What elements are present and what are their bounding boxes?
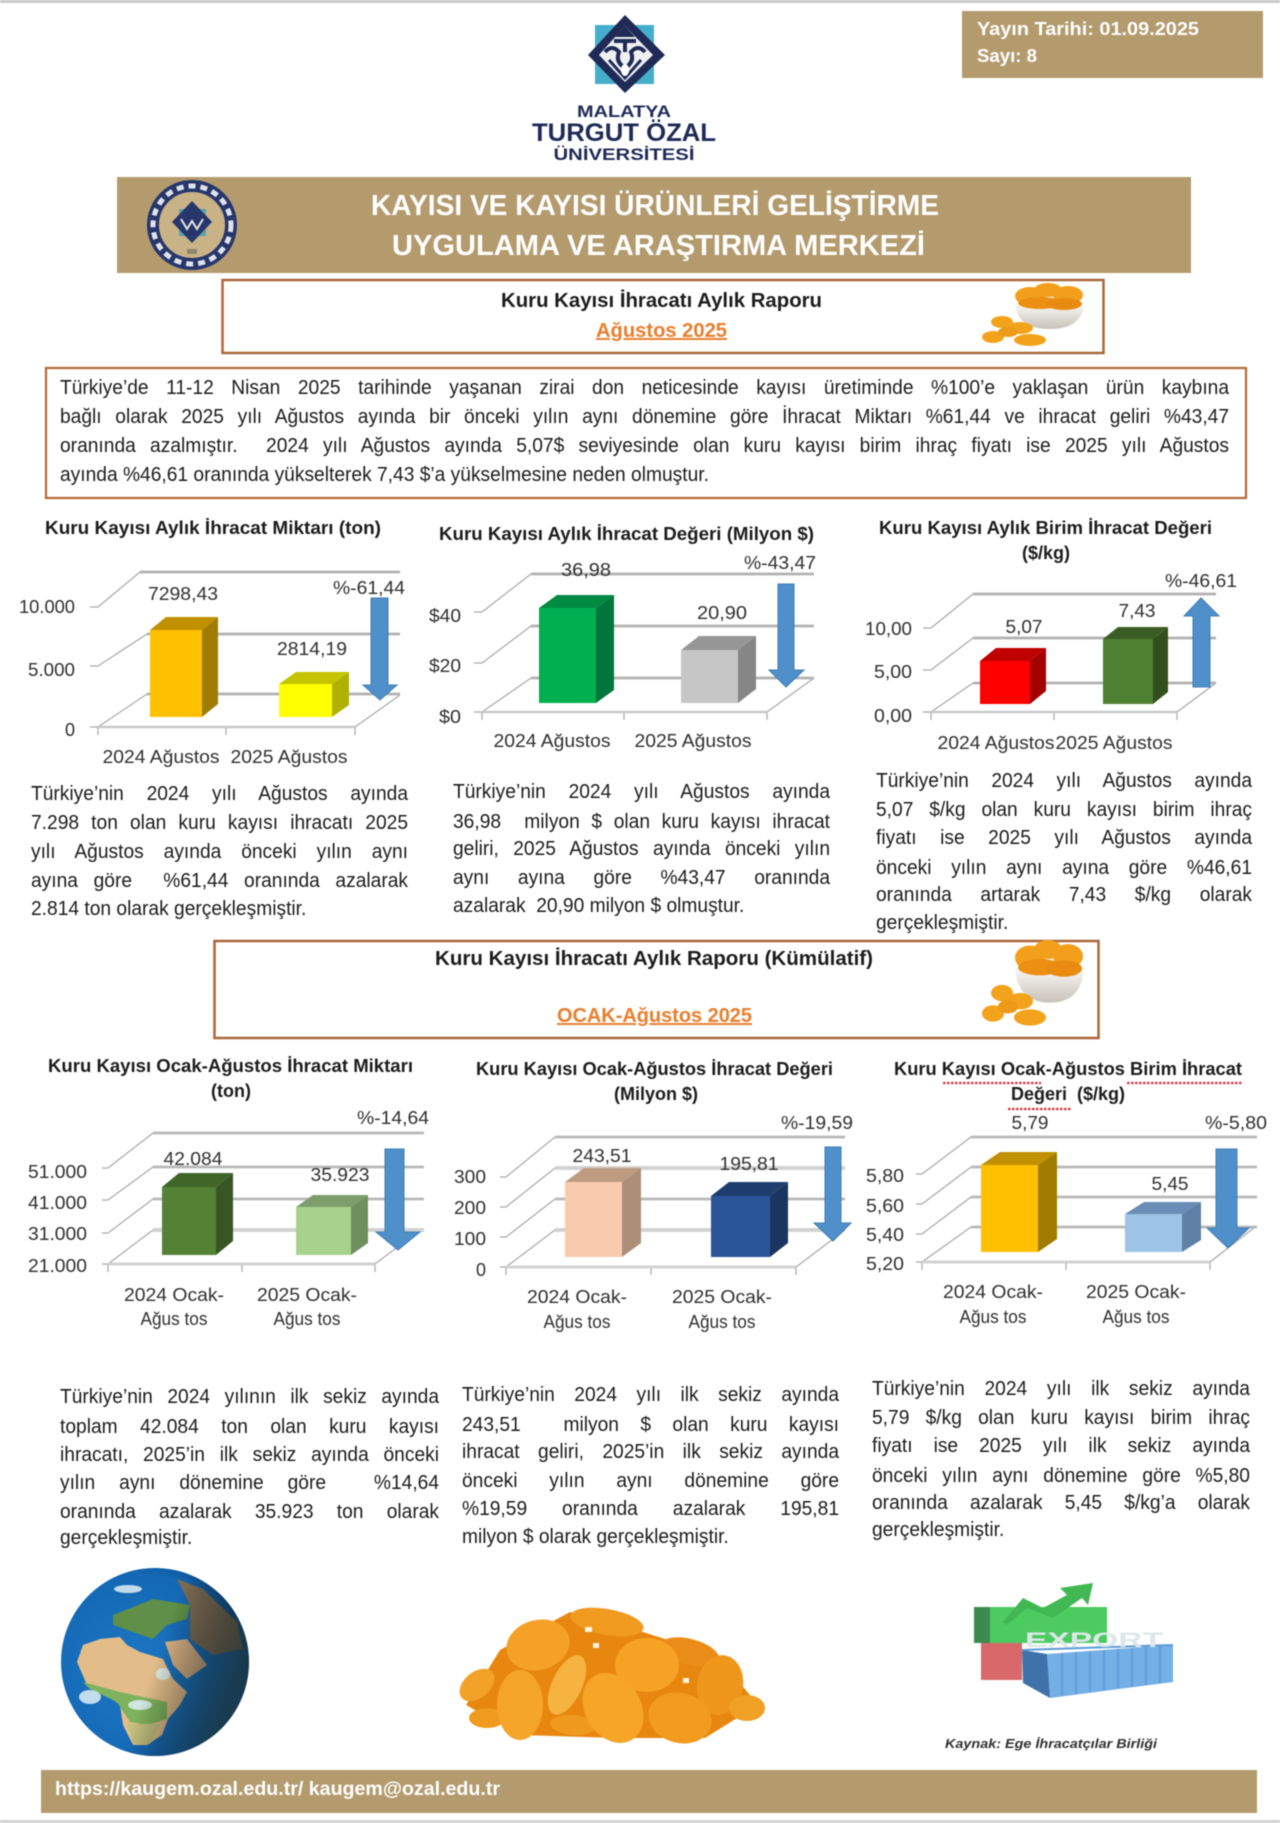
chart: cumulative unit export value: 5,79: [1012, 1113, 1048, 1133]
bar 2025: [296, 1195, 368, 1255]
chart: cumulative export value: [454, 1059, 853, 1332]
text: cumulative value description: milyon $ olarak gerçekleşmiştir.: [462, 1526, 729, 1548]
source note: Kaynak: Ege İhracatçılar Birliği: [945, 1736, 1157, 1751]
arrow: down: [363, 598, 397, 700]
intro panel frame: [46, 368, 1246, 498]
icon: bowl of apricots: [982, 283, 1084, 346]
chart title: Kuru Kayısı Ocak-Ağustos Birim İhracat: [894, 1059, 1242, 1079]
chart: cumulative export value: 0: [476, 1260, 486, 1280]
chart: cumulative export quantity: Ağus tos: [274, 1309, 340, 1329]
text: cumulative value description: Türkiye’nin 2024 yılı ilk sekiz ayında: [462, 1384, 839, 1406]
text: cumulative unit value description: 5,79 $/kg olan kuru kayısı birim ihraç: [872, 1407, 1250, 1429]
text: monthly value description: aynı ayına göre %43,47 oranında: [453, 867, 830, 889]
chart: monthly export value: 2024 Ağustos: [494, 731, 610, 751]
chart title: (ton): [211, 1081, 251, 1101]
chart title: [894, 1059, 1243, 1109]
text: cumulative unit value description: önceki yılın aynı dönemine göre %5,80: [872, 1465, 1250, 1487]
chart: cumulative unit export value: 2025 Ocak-: [1086, 1282, 1186, 1302]
chart: cumulative export value: 195,81: [720, 1154, 778, 1174]
chart: monthly export quantity: [19, 518, 405, 767]
chart: monthly export quantity: 2814,19: [277, 639, 347, 659]
chart: cumulative export quantity: 21.000: [28, 1256, 87, 1276]
text: cumulative value description: %19,59 oranında azalarak 195,81: [462, 1498, 839, 1520]
text: monthly unit value description: 5,07 $/kg olan kuru kayısı birim ihraç: [876, 799, 1252, 821]
text: monthly quantity description: 7.298 ton olan kuru kayısı ihracatı 2025: [31, 812, 408, 834]
image: export containers: [974, 1583, 1173, 1698]
chart: cumulative export value: 200: [454, 1198, 486, 1218]
icon: bowl of apricots: [982, 940, 1084, 1026]
text: monthly unit value description: Türkiye’nin 2024 yılı Ağustos ayında: [876, 770, 1252, 792]
bar 2024: [980, 648, 1046, 704]
report heading box: August 2025: [222, 280, 1104, 353]
chart title: Kuru Kayısı Ocak-Ağustos İhracat Değeri: [476, 1059, 833, 1079]
chart title: Kuru Kayısı Ocak-Ağustos İhracat Miktarı: [48, 1056, 413, 1076]
chart: monthly export quantity: 2025 Ağustos: [230, 747, 348, 767]
image: dried apricot pile: [453, 1603, 765, 1754]
chart: cumulative export quantity: 41.000: [28, 1193, 87, 1213]
text: cumulative quantity description: oranında azalarak 35.923 ton olarak: [60, 1501, 439, 1523]
text: monthly quantity description: [30, 783, 409, 920]
publication date box: Yayın Tarihi: 01.09.2025: [977, 19, 1199, 39]
chart: monthly export value: $40: [429, 606, 461, 626]
image: export containers: EXPORT: [1025, 1629, 1163, 1652]
publication date box: [962, 11, 1263, 78]
chart title: Kuru Kayısı Aylık Birim İhracat Değeri: [879, 518, 1212, 538]
text: cumulative unit value description: fiyatı ise 2025 yılı ilk sekiz ayında: [872, 1435, 1250, 1457]
chart: monthly export quantity: 2024 Ağustos: [102, 747, 220, 767]
chart: cumulative export quantity: 42.084: [164, 1149, 222, 1169]
report heading box: January-August 2025: OCAK-Ağustos 2025: [557, 1005, 752, 1027]
text: monthly unit value description: gerçekleşmiştir.: [876, 912, 1008, 934]
chart: cumulative unit export value: 5,40: [866, 1225, 904, 1245]
bar 2025: [1125, 1202, 1201, 1252]
text: intro paragraph: [60, 377, 1230, 486]
chart title: [476, 1059, 833, 1104]
bottom edge line: [0, 1820, 1280, 1823]
text: intro paragraph: Türkiye’de 11-12 Nisan 2025 tarihinde yaşanan zirai don neticesinde kayısı üretiminde %100’e yaklaşan ürün kaybına: [60, 377, 1229, 399]
chart: cumulative export value: 2024 Ocak-: [527, 1287, 627, 1307]
text: monthly value description: geliri, 2025 Ağustos ayında önceki yılın: [453, 838, 830, 860]
chart: cumulative export value: %-19,59: [781, 1113, 853, 1133]
text: cumulative unit value description: oranında azalarak 5,45 $/kg’a olarak: [872, 1492, 1250, 1514]
chart: monthly unit export value: 7,43: [1118, 601, 1156, 621]
chart: monthly export value: $20: [429, 656, 461, 676]
chart title: (Milyon $): [614, 1084, 698, 1104]
bar 2024: [150, 617, 218, 717]
chart: monthly export quantity: 7298,43: [148, 584, 218, 604]
top edge line: [0, 0, 1280, 3]
text: cumulative value description: ihracat geliri, 2025’in ilk sekiz ayında: [462, 1441, 839, 1463]
text: intro paragraph: ayında %46,61 oranında yükselterek 7,43 $’a yükselmesine neden olmuştur.: [60, 464, 709, 486]
bar 2025: [681, 636, 756, 703]
chart: monthly export value: [429, 524, 816, 751]
text: cumulative value description: 243,51 milyon $ olan kuru kayısı: [462, 1414, 839, 1436]
text: monthly quantity description: ayına göre %61,44 oranında azalarak: [31, 870, 408, 892]
chart: monthly export value: $0: [439, 707, 461, 727]
text: monthly value description: azalarak 20,90 milyon $ olmuştur.: [453, 895, 744, 917]
chart: cumulative export quantity: 2024 Ocak-: [124, 1285, 224, 1305]
chart: cumulative unit export value: 5,60: [866, 1196, 904, 1216]
text: monthly quantity description: Türkiye’nin 2024 yılı Ağustos ayında: [31, 783, 408, 805]
text: cumulative quantity description: Türkiye’nin 2024 yılının ilk sekiz ayında: [60, 1386, 439, 1408]
chart: monthly export value: 20,90: [697, 603, 747, 623]
university logo: MALATYA: [577, 102, 671, 121]
icon: university seal: [153, 186, 231, 264]
text: cumulative value description: [462, 1384, 840, 1548]
chart: cumulative unit export value: Ağus tos: [1102, 1307, 1170, 1327]
chart: monthly export value: 36,98: [561, 560, 611, 580]
chart: cumulative unit export value: 2024 Ocak-: [943, 1282, 1043, 1302]
university logo: TURGUT ÖZAL: [532, 118, 716, 147]
chart: monthly export quantity: 5.000: [28, 660, 75, 680]
text: monthly value description: Türkiye’nin 2024 yılı Ağustos ayında: [453, 781, 830, 803]
arrow: up: [1184, 598, 1219, 687]
report heading box: August 2025: Kuru Kayısı İhracatı Aylık Raporu: [501, 289, 822, 312]
bar 2024: [565, 1168, 641, 1257]
chart: monthly unit export value: 0,00: [874, 706, 912, 726]
chart: monthly unit export value: 2024 Ağustos: [938, 733, 1054, 753]
report heading box: January-August 2025: Kuru Kayısı İhracatı Aylık Raporu (Kümülatif): [435, 947, 873, 970]
chart: cumulative unit export value: Ağus tos: [960, 1307, 1026, 1327]
header banner: [117, 177, 1191, 273]
text: monthly unit value description: oranında artarak 7,43 $/kg olarak: [876, 884, 1252, 906]
chart: monthly unit export value: 10,00: [865, 619, 912, 639]
chart: cumulative export quantity: [28, 1056, 429, 1329]
chart: monthly unit export value: 5,00: [874, 662, 912, 682]
chart title: ($/kg): [1022, 543, 1070, 563]
text: intro paragraph: oranında azalmıştır. 2024 yılı Ağustos ayında 5,07$ seviyesinde olan kuru kayısı birim ihraç fiyatı ise 2025 yılı Ağustos: [60, 435, 1229, 457]
text: cumulative quantity description: toplam 42.084 ton olan kuru kayısı: [60, 1416, 439, 1438]
chart: cumulative export value: 300: [454, 1167, 486, 1187]
footer bar: [41, 1770, 1257, 1813]
chart title: [48, 1056, 413, 1101]
arrow: down: [1207, 1149, 1249, 1248]
text: cumulative unit value description: [872, 1378, 1251, 1541]
chart: cumulative export value: Ağus tos: [544, 1312, 610, 1332]
text: monthly unit value description: önceki yılın aynı ayına göre %46,61: [876, 857, 1252, 879]
university logo: [532, 15, 716, 164]
text: cumulative unit value description: Türkiye’nin 2024 yılı ilk sekiz ayında: [872, 1378, 1250, 1400]
arrow: down: [769, 584, 804, 687]
report heading box: January-August 2025: [214, 940, 1098, 1038]
publication date box: Sayı: 8: [977, 46, 1037, 66]
chart: monthly unit export value: 2025 Ağustos: [1056, 733, 1172, 753]
chart: cumulative export quantity: 51.000: [28, 1162, 87, 1182]
chart: cumulative export quantity: Ağus tos: [140, 1309, 208, 1329]
chart: cumulative unit export value: 5,80: [866, 1166, 904, 1186]
chart: monthly unit export value: %-46,61: [1165, 571, 1237, 591]
text: intro paragraph: bağlı olarak 2025 yılı Ağustos ayında bir önceki yılın aynı dönemine göre İhracat Miktarı %61,44 ve ihracat geliri %43,47: [60, 406, 1229, 428]
text: monthly quantity description: 2.814 ton olarak gerçekleşmiştir.: [31, 898, 306, 920]
chart: cumulative export value: 243,51: [572, 1146, 632, 1166]
bar 2025: [1103, 627, 1168, 704]
text: cumulative quantity description: yılın aynı dönemine göre %14,64: [60, 1472, 439, 1494]
chart: cumulative export value: 2025 Ocak-: [672, 1287, 772, 1307]
bar 2024: [162, 1173, 233, 1255]
text: cumulative unit value description: gerçekleşmiştir.: [872, 1519, 1004, 1541]
chart title: [879, 518, 1212, 563]
chart: cumulative unit export value: 5,20: [866, 1254, 904, 1274]
image: globe: [61, 1568, 249, 1756]
text: monthly unit value description: fiyatı ise 2025 yılı Ağustos ayında: [876, 827, 1252, 849]
chart: cumulative export quantity: 2025 Ocak-: [257, 1285, 357, 1305]
chart: cumulative export quantity: 35.923: [310, 1165, 370, 1185]
text: cumulative quantity description: [60, 1386, 440, 1549]
bar 2025: [279, 672, 349, 717]
chart: monthly unit export value: 5,07: [1006, 617, 1042, 637]
report heading box: August 2025: Ağustos 2025: [596, 320, 727, 342]
arrow: down: [376, 1149, 420, 1250]
bar 2025: [711, 1182, 788, 1257]
chart title: Kuru Kayısı Aylık İhracat Miktarı (ton): [45, 518, 381, 538]
chart title: Kuru Kayısı Aylık İhracat Değeri (Milyon $): [439, 524, 814, 544]
text: cumulative quantity description: ihracatı, 2025’in ilk sekiz ayında önceki: [60, 1444, 439, 1466]
footer bar: https://kaugem.ozal.edu.tr/ kaugem@ozal.edu.tr: [55, 1779, 501, 1800]
chart: cumulative export quantity: 31.000: [28, 1224, 87, 1244]
bar 2024: [539, 595, 614, 703]
chart: monthly export value: %-43,47: [744, 553, 816, 573]
header banner: KAYISI VE KAYISI ÜRÜNLERİ GELİŞTİRME: [371, 189, 939, 222]
arrow: down: [814, 1147, 851, 1241]
chart title: Değeri ($/kg): [1011, 1084, 1125, 1104]
bar 2024: [981, 1152, 1057, 1252]
chart: monthly export quantity: 10.000: [19, 597, 75, 617]
text: monthly value description: [452, 781, 831, 917]
chart: monthly unit export value: [865, 518, 1237, 753]
chart: monthly export quantity: %-61,44: [333, 578, 405, 598]
header banner: UYGULAMA VE ARAŞTIRMA MERKEZİ: [392, 230, 925, 262]
chart: monthly export quantity: 0: [65, 720, 75, 740]
university logo: ÜNİVERSİTESİ: [554, 145, 694, 164]
chart: cumulative export value: 100: [454, 1229, 486, 1249]
text: monthly unit value description: [876, 770, 1253, 934]
chart: cumulative export quantity: %-14,64: [357, 1108, 429, 1128]
chart: cumulative export value: Ağus tos: [688, 1312, 756, 1332]
text: cumulative quantity description: gerçekleşmiştir.: [60, 1527, 192, 1549]
text: monthly quantity description: yılı Ağustos ayında önceki yılın aynı: [31, 841, 408, 863]
text: monthly value description: 36,98 milyon $ olan kuru kayısı ihracat: [453, 811, 830, 833]
chart: monthly export value: 2025 Ağustos: [634, 731, 752, 751]
chart: cumulative unit export value: %-5,80: [1205, 1113, 1267, 1133]
text: cumulative value description: önceki yılın aynı dönemine göre: [462, 1470, 839, 1492]
chart: cumulative unit export value: [866, 1059, 1267, 1327]
chart: cumulative unit export value: 5,45: [1152, 1174, 1188, 1194]
